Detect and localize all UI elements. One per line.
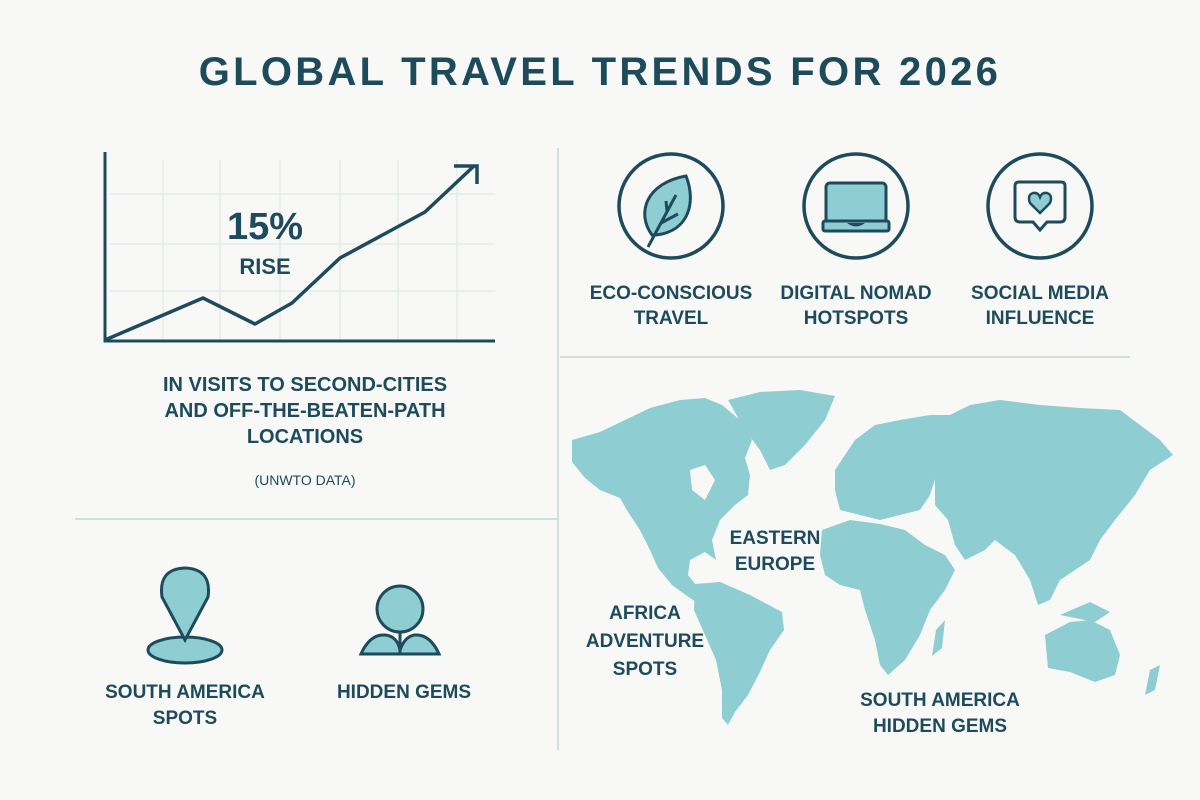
label: nomad: DIGITAL NOMAD: [780, 283, 932, 304]
label: nomad: [780, 283, 932, 329]
label: hidden gems: HIDDEN GEMS: [337, 682, 471, 703]
map label: south america: HIDDEN GEMS: [873, 716, 1007, 737]
caption text: IN VISITS TO SECOND-CITIES: [163, 374, 447, 396]
label: eco: ECO-CONSCIOUS: [590, 283, 752, 304]
icon: plant: [358, 584, 442, 656]
map label: africa: [586, 603, 704, 680]
map label: africa: SPOTS: [613, 659, 677, 680]
text: RISE: [239, 254, 291, 279]
title: GLOBAL TRAVEL TRENDS FOR 2026: [199, 50, 1001, 94]
map label: south america: [860, 690, 1020, 737]
icon: social heart: [986, 152, 1094, 260]
label: social: [971, 283, 1109, 329]
map label: eastern europe: EASTERN: [730, 528, 820, 549]
label: south america spots: [105, 682, 265, 729]
label: nomad: HOTSPOTS: [804, 308, 908, 329]
label: south america spots: SPOTS: [153, 708, 217, 729]
map label: africa: ADVENTURE: [586, 631, 704, 652]
label: eco: TRAVEL: [634, 308, 708, 329]
icon: laptop: [802, 152, 910, 260]
caption text: [163, 374, 447, 448]
stat: 15% rise: 15%: [227, 206, 303, 248]
label: south america spots: SOUTH AMERICA: [105, 682, 265, 703]
map label: africa: AFRICA: [609, 603, 681, 624]
icon: pin: [146, 566, 224, 664]
map label: eastern europe: [730, 528, 820, 575]
icon: leaf: [617, 152, 725, 260]
map label: south america: SOUTH AMERICA: [860, 690, 1020, 711]
label: eco: [590, 283, 752, 329]
caption text: LOCATIONS: [247, 426, 363, 448]
caption text: AND OFF-THE-BEATEN-PATH: [164, 400, 446, 422]
label: social: INFLUENCE: [986, 308, 1094, 329]
map label: eastern europe: EUROPE: [735, 554, 815, 575]
line chart: [105, 152, 495, 341]
label: social: SOCIAL MEDIA: [971, 283, 1109, 304]
source: (UNWTO DATA): [254, 472, 356, 488]
